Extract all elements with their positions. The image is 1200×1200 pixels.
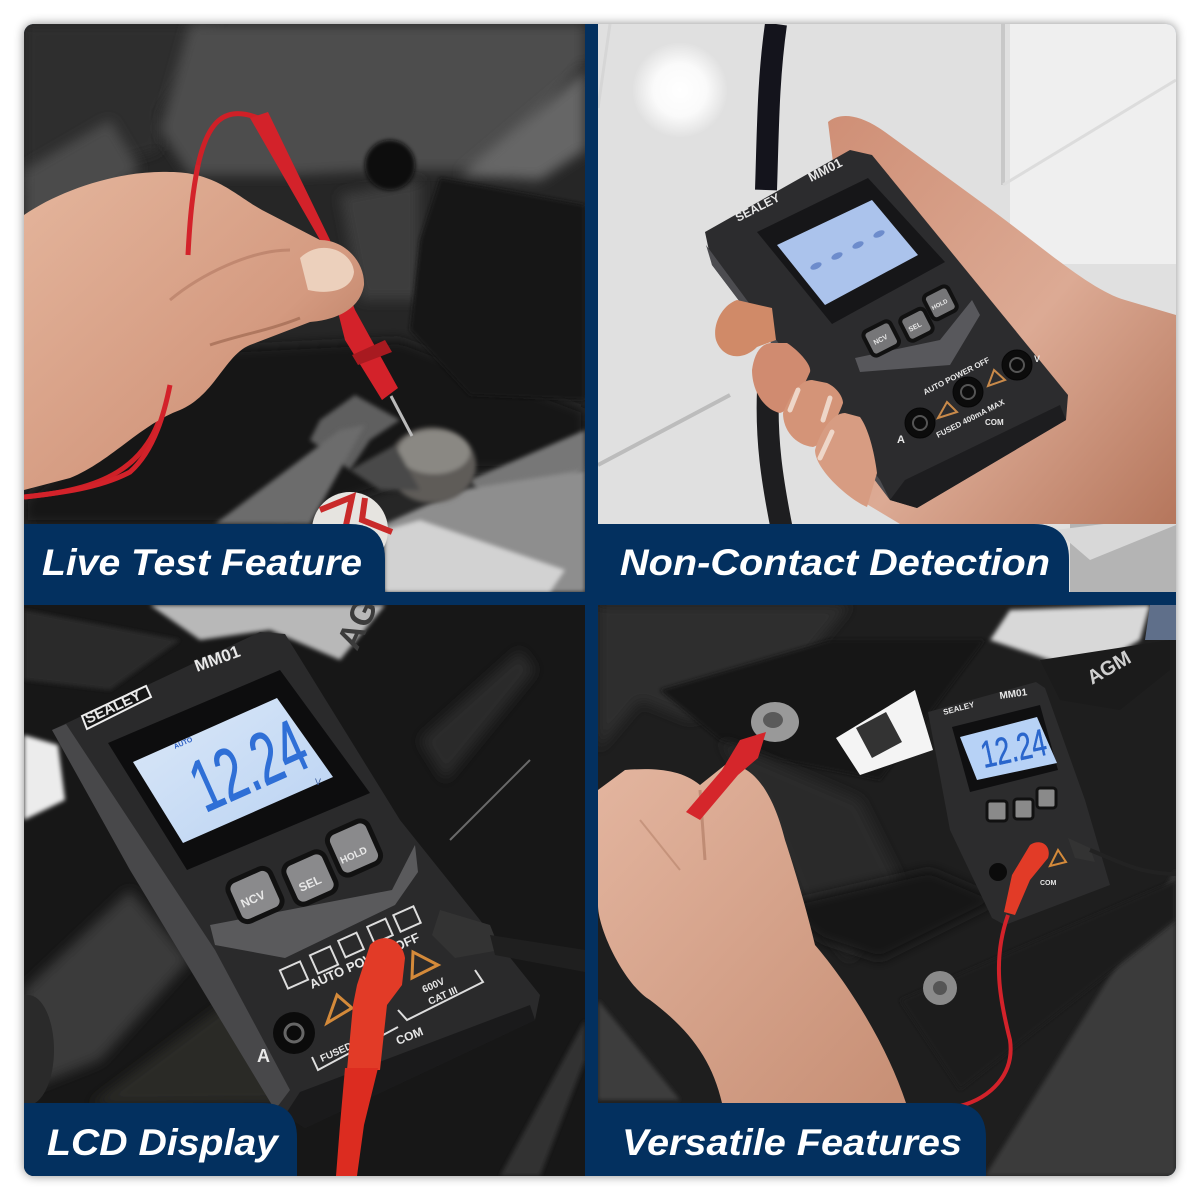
panel: live test feature (24, 24, 585, 592)
auto power off: AUTO POWER OFF (307, 930, 422, 992)
port markings: FUSED (319, 1041, 354, 1065)
black probe plug (432, 910, 585, 972)
button hold: HOLD (339, 845, 369, 867)
lcd reading: 12.24 (977, 722, 1050, 777)
lcd screen (960, 717, 1057, 780)
lcd screen (777, 200, 918, 305)
red probe held (686, 732, 766, 820)
port markings: COM (394, 1024, 425, 1048)
lcd bezel (757, 178, 945, 324)
meter body (52, 632, 540, 1128)
label: non-contact detection (585, 524, 1069, 592)
red test lead (24, 114, 258, 497)
trim band (855, 300, 980, 372)
port markings: 600V (421, 976, 447, 996)
socket a (989, 863, 1007, 881)
thumb nail (300, 248, 354, 292)
red lead (960, 842, 1049, 1106)
label: live test feature: Live Test Feature (42, 542, 362, 583)
label: live test feature (24, 524, 385, 592)
multimeter: MM01 (806, 155, 845, 185)
hand behind meter (828, 116, 1176, 524)
black probe and cable (1068, 838, 1176, 874)
hand holding probe (24, 172, 364, 490)
lcd bezel (108, 670, 370, 870)
button ncv: NCV (239, 888, 267, 911)
white qr label (836, 690, 933, 775)
warning triangle (1050, 850, 1066, 866)
battery terminal (350, 427, 476, 503)
control buttons: HOLD (931, 298, 950, 312)
multimeter (705, 150, 1068, 508)
control buttons: NCV (873, 334, 889, 347)
red probe (250, 112, 412, 436)
black cable (766, 24, 782, 530)
port markings: CAT III (427, 985, 460, 1008)
lcd reading: 12.24 (178, 704, 319, 828)
lead passing over hand (24, 165, 198, 497)
port markings: A (257, 1046, 270, 1066)
button ncv (225, 866, 285, 924)
panel: lcd display (2, 567, 585, 1176)
model name: MM01 (192, 642, 243, 676)
port label: COM (1040, 880, 1056, 887)
button hold (325, 818, 383, 878)
brand labels: SEALEY (942, 700, 976, 717)
label: lcd display (24, 1103, 297, 1176)
white block wall (598, 24, 1176, 592)
battery background: AGM (1084, 647, 1135, 689)
port markings (257, 970, 483, 1070)
multimeter large (52, 632, 540, 1128)
mounting stud (923, 971, 957, 1005)
socket a (273, 1012, 315, 1054)
port markings (897, 354, 1040, 446)
label: versatile features: Versatile Features (622, 1122, 962, 1163)
panel: versatile features (598, 605, 1176, 1176)
control buttons: SEL (908, 321, 924, 334)
label: versatile features (585, 1103, 986, 1176)
dark engine background (2, 567, 585, 1176)
port markings: A (897, 434, 905, 446)
battery terminal (751, 702, 799, 742)
label: non-contact detection: Non-Contact Detection (620, 542, 1050, 583)
warning triangles (938, 370, 1005, 418)
lcd bezel (952, 705, 1058, 792)
brand labels: SEALEY (733, 190, 782, 225)
button sel: SEL (297, 872, 324, 895)
battery background (598, 605, 1176, 1176)
multimeter small: MM01 (999, 687, 1028, 702)
meter body (928, 682, 1110, 925)
fingers (715, 300, 877, 507)
port markings: V (1034, 354, 1040, 364)
warning triangles (327, 952, 438, 1023)
button sel (281, 849, 339, 907)
control buttons (987, 788, 1056, 821)
input sockets (905, 350, 1032, 438)
mode icons (280, 906, 421, 989)
lcd dashes (809, 229, 886, 271)
lcd auto badge: AUTO (173, 736, 194, 751)
red probe plug (336, 938, 405, 1176)
panel: non-contact detection (598, 24, 1176, 592)
dark engine background: AGM (330, 567, 398, 655)
brand logo: SEALEY (83, 687, 144, 728)
meter body (705, 150, 1068, 508)
port markings: COM (985, 418, 1004, 427)
black sleeve (410, 178, 585, 400)
engine bay background (24, 24, 585, 592)
lcd screen (133, 698, 333, 843)
lcd unit: V (315, 777, 321, 787)
trim band (210, 845, 418, 958)
port markings: AUTO POWER OFF (922, 355, 991, 397)
label: lcd display: LCD Display (47, 1122, 281, 1163)
hand and forearm (598, 765, 906, 1103)
control buttons (862, 285, 958, 357)
multimeter small (928, 682, 1110, 925)
port markings: FUSED 400mA MAX (935, 397, 1007, 440)
